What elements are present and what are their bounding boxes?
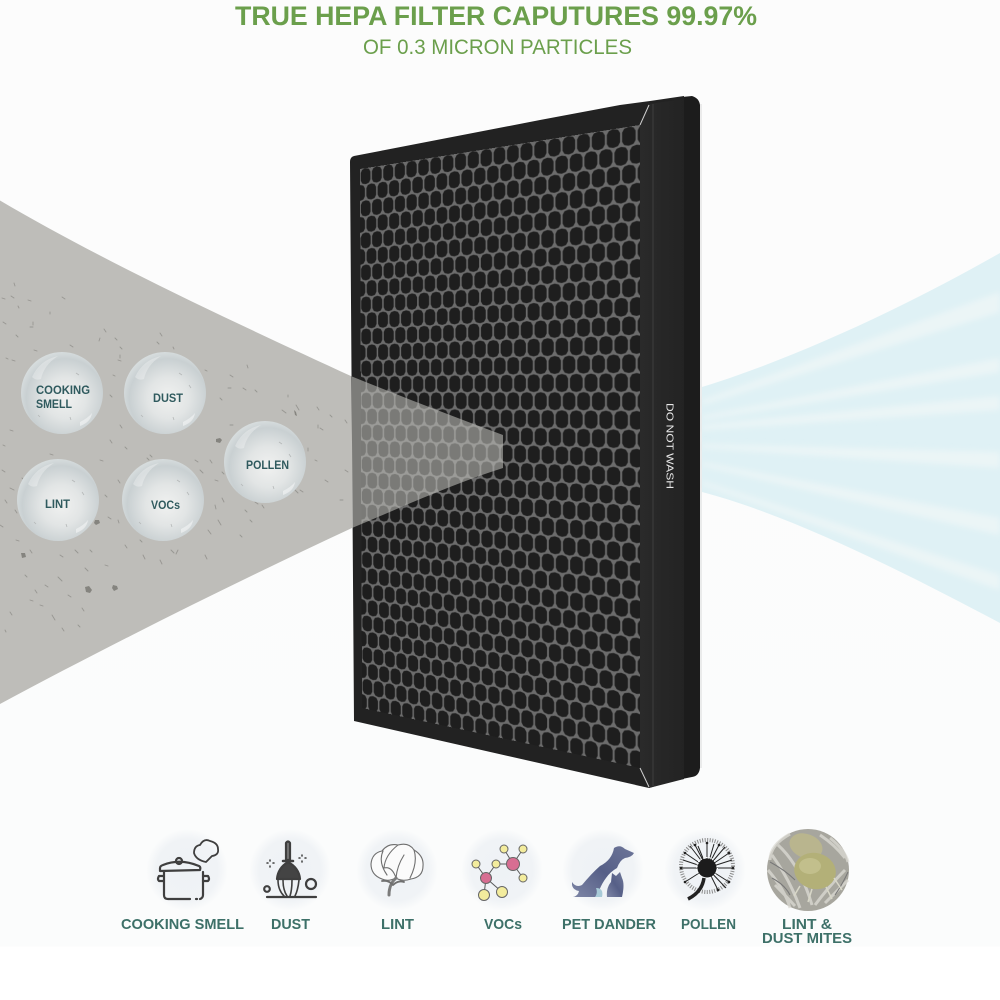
- bubble: dust: DUST: [153, 393, 183, 405]
- icon: VOC molecules: [461, 829, 543, 911]
- label row: COOKING SMELL: [121, 916, 244, 933]
- bubble: lint: LINT: [45, 499, 70, 511]
- frame: [350, 96, 684, 788]
- label row: DUST: [271, 916, 310, 933]
- bubble: pollen: POLLEN: [246, 460, 289, 472]
- dust blobs: [21, 410, 297, 593]
- icon: cooking pot: [146, 829, 228, 911]
- icon: dust mites photo: [767, 829, 849, 911]
- translucent cone over filter: [352, 376, 503, 528]
- title: TRUE HEPA FILTER CAPUTURES 99.97%: [235, 1, 757, 31]
- dust specks: [0, 283, 348, 632]
- icon: cotton boll: [356, 829, 438, 911]
- honeycomb filter media: [360, 125, 640, 766]
- subtitle: OF 0.3 MICRON PARTICLES: [363, 36, 632, 59]
- icon: dog and cat silhouette: [562, 829, 644, 911]
- clean airflow fan: [702, 253, 1000, 623]
- side panel: [640, 99, 684, 788]
- label row: POLLEN: [681, 916, 736, 933]
- bubble: cooking smell: SMELL: [36, 399, 72, 411]
- bubble: cooking smell: [21, 352, 103, 434]
- airflow streaks: [702, 292, 1000, 590]
- foam gasket: [672, 96, 700, 781]
- wash warning text: DO NOT WASH: [664, 403, 676, 489]
- label row: LINT: [381, 916, 414, 933]
- bubble: VOCs: VOCs: [151, 500, 180, 512]
- label row: VOCs: [484, 916, 522, 933]
- intake air cone with dust specks: [0, 200, 352, 704]
- label row: LINT &: [782, 916, 832, 933]
- frame corner highlights: [640, 105, 649, 787]
- filter body: [350, 96, 701, 788]
- bubble: lint: [17, 459, 99, 541]
- label row: [121, 916, 852, 947]
- label row: PET DANDER: [562, 916, 656, 933]
- bubble: dust: [124, 352, 206, 434]
- title: [235, 1, 757, 59]
- icon: broom: [249, 829, 331, 911]
- bubble: cooking smell: COOKING: [36, 385, 90, 397]
- icon: dandelion pollen: [664, 829, 746, 911]
- bubble: VOCs: [122, 459, 204, 541]
- bubble: pollen: [224, 421, 306, 503]
- label row: DUST MITES: [762, 930, 852, 947]
